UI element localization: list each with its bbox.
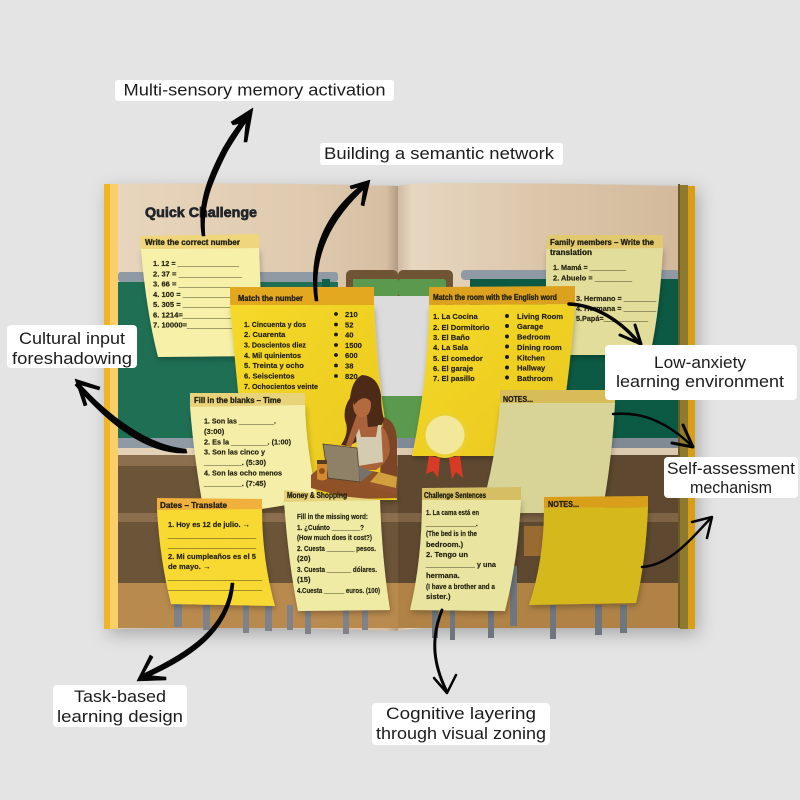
note: notes yellow [529, 496, 648, 605]
note: challenge sentences: (The bed is in the [426, 529, 477, 538]
label: low-anxiety learning environment [605, 345, 797, 400]
label: cultural input foreshadowing: Cultural input [19, 329, 125, 348]
label: cultural input foreshadowing: foreshadowing [12, 349, 132, 368]
note: money and shopping: 1. ¿Cuánto ________? [297, 523, 364, 532]
note: family members: translation [550, 248, 592, 257]
note: family members: 3. Hermano = ________ [576, 294, 657, 303]
book shadow [108, 190, 698, 634]
note: write the correct number [140, 234, 263, 357]
note: fill in the blanks: _________. (7:45) [203, 479, 266, 488]
note: match the room: 3. El Baño [433, 333, 470, 342]
note: match the room: 2. El Dormitorio [433, 323, 490, 332]
note: fill in the blanks: 2. Es la _________. (1:00) [204, 438, 291, 446]
label: cultural input foreshadowing [7, 325, 137, 368]
note: dates translate: ____________________ [167, 583, 263, 592]
note: family members [546, 235, 663, 355]
note: fill in the blanks: 1. Son las _________. [204, 416, 276, 426]
note: family members: 5.Papá=___________ [576, 314, 649, 323]
note: dates translate: 2. Mi cumpleaños es el 5 [168, 552, 257, 561]
note: family members: 1. Mamá = _________ [553, 263, 627, 272]
note: money and shopping: Fill in the missing word: [297, 512, 368, 521]
note: write the correct number: 4. 100 = ______________ [153, 290, 243, 299]
note: match the number: Match the number [238, 294, 303, 303]
note: challenge sentences: sister.) [426, 592, 451, 601]
label: task-based learning design: learning design [57, 707, 183, 726]
left page [104, 183, 398, 634]
note: match the room [412, 286, 575, 456]
note: match the number: 6. Seiscientos [244, 372, 295, 380]
label: low-anxiety learning environment: Low-anxiety [654, 353, 746, 372]
arrow to self-assessment lower [642, 517, 712, 567]
note: dates translate: Dates – Translate [160, 501, 228, 510]
note: match the room: Bedroom [517, 332, 551, 342]
note: challenge sentences: 1. La cama está en [426, 508, 479, 517]
note: write the correct number: 5. 305 = ______________ [153, 300, 243, 309]
note: notes large: NOTES... [503, 395, 533, 404]
note: money and shopping: (15) [297, 575, 311, 584]
note: match the number: 52 [345, 320, 353, 330]
label: cognitive layering through visual zoning [372, 703, 550, 745]
label: cognitive layering through visual zoning: through visual zoning [376, 724, 546, 743]
icon: gold seal with ribbons [422, 412, 468, 479]
note: dates translate: 1. Hoy es 12 de julio. → [168, 520, 250, 529]
note: money and shopping: 3. Cuesta _______ dólares. [297, 565, 377, 574]
note: money and shopping: (How much does it cost?) [297, 533, 372, 542]
note: money and shopping [284, 490, 390, 611]
label: low-anxiety learning environment: learning environment [616, 372, 784, 391]
note: match the room: Garage [517, 322, 543, 331]
note: money and shopping: 4.Cuesta ______ euros. (100) [297, 586, 380, 595]
note: match the number: 600 [345, 351, 358, 360]
note: money and shopping: (20) [297, 554, 311, 563]
note: match the number: 1. Cincuenta y dos [244, 320, 306, 329]
note: family members: Family members – Write the [550, 238, 655, 247]
note: dates translate: ____________________ [167, 573, 263, 582]
note: match the room: Dining room [517, 343, 562, 352]
right page [398, 183, 695, 640]
arrow to self-assessment upper [613, 414, 693, 447]
note: match the room: Kitchen [517, 354, 545, 362]
open book [104, 183, 695, 640]
note: match the room: Match the room with the English word [433, 293, 557, 302]
note: fill in the blanks: (3:00) [204, 427, 225, 436]
note: money and shopping: 2. Cuesta ________ pesos. [297, 544, 376, 553]
note: match the room: 1. La Cocina [433, 312, 479, 321]
note: match the room: Living Room [517, 312, 563, 321]
note: match the room: 5. El comedor [433, 354, 483, 363]
note: notes yellow: NOTES... [548, 500, 579, 509]
note: match the room: Bathroom [517, 374, 553, 383]
arrow to cultural input [75, 379, 187, 453]
heading: Quick Challenge: Quick Challenge [145, 204, 257, 220]
note: dates translate [157, 498, 275, 606]
arrow to building a semantic network [313, 180, 370, 301]
note: match the room: 4. La Sala [433, 343, 469, 352]
note: challenge sentences: bedroom.) [426, 540, 464, 549]
note: challenge sentences: (I have a brother and a [426, 582, 496, 591]
note: challenge sentences: ____________ y una [425, 560, 497, 569]
note: notes large [480, 390, 615, 513]
note: fill in the blanks: Fill in the blanks – Time [194, 396, 282, 405]
note: fill in the blanks: 3. Son las cinco y [204, 448, 266, 456]
note: write the correct number: 2. 37 = _______________ [153, 270, 243, 278]
note: write the correct number: 1. 12 = _______________ [153, 259, 240, 268]
label: multi-sensory memory activation: Multi-sensory memory activation [124, 80, 386, 100]
note: match the number: 5. Treinta y ocho [244, 361, 304, 370]
note: family members: 4. Hermana = ________ [576, 304, 657, 313]
note: challenge sentences: 2. Tengo un [426, 550, 468, 559]
arrow to multi-sensory memory activation [201, 108, 253, 236]
label: self-assessment mechanism: mechanism [690, 478, 772, 497]
note: write the correct number: 6. 1214=______________ [153, 310, 243, 320]
illustration: woman at laptop [311, 375, 397, 499]
note: match the number: 2. Cuarenta [244, 330, 286, 339]
note: money and shopping: Money & Shopping [287, 491, 347, 500]
note: fill in the blanks: _________. (5:30) [203, 458, 266, 467]
label: cognitive layering through visual zoning: Cognitive layering [386, 704, 536, 723]
arrow to cognitive layering [434, 610, 456, 693]
note: write the correct number: 3. 66 = _______________ [153, 280, 243, 288]
note: match the number: 210 [345, 310, 358, 319]
note: write the correct number: Write the correct number [145, 238, 240, 247]
note: dates translate: de mayo. → [168, 562, 211, 571]
note: challenge sentences: hermana. [426, 571, 460, 580]
note: match the number [230, 287, 397, 500]
note: match the room: Hallway [517, 364, 546, 372]
note: write the correct number: 7. 10000=_____________ [153, 320, 243, 330]
label: self-assessment mechanism: Self-assessment [667, 459, 795, 478]
note: fill in the blanks [190, 393, 318, 518]
note: challenge sentences [410, 487, 521, 611]
note: match the room: 7. El pasillo [433, 374, 475, 383]
label: building a semantic network: Building a semantic network [324, 144, 555, 163]
note: match the number: 38 [345, 362, 353, 370]
arrow to task-based learning [137, 583, 234, 681]
note: match the room: 6. El garaje [433, 364, 473, 373]
note: match the number: 1500 [345, 341, 362, 350]
note: family members: 2. Abuelo = _________ [553, 274, 633, 282]
note: challenge sentences: Challenge Sentences [424, 491, 487, 500]
note: match the number: 40 [345, 330, 353, 340]
note: match the number: 820 [345, 372, 358, 381]
note: dates translate: ___________________ [167, 541, 257, 550]
note: match the number: 7. Ochocientos veinte [244, 382, 318, 391]
note: dates translate: ___________________ [167, 531, 257, 540]
label: task-based learning design: Task-based [74, 687, 166, 706]
label: task-based learning design [53, 685, 187, 727]
label: self-assessment mechanism [664, 457, 798, 498]
note: match the number: 4. Mil quinientos [244, 351, 301, 360]
arrow to low-anxiety [569, 304, 641, 344]
note: challenge sentences: ____________. [425, 519, 478, 528]
note: fill in the blanks: 4. Son las ocho menos [204, 468, 282, 478]
note: match the number: 3. Doscientos diez [244, 340, 306, 350]
